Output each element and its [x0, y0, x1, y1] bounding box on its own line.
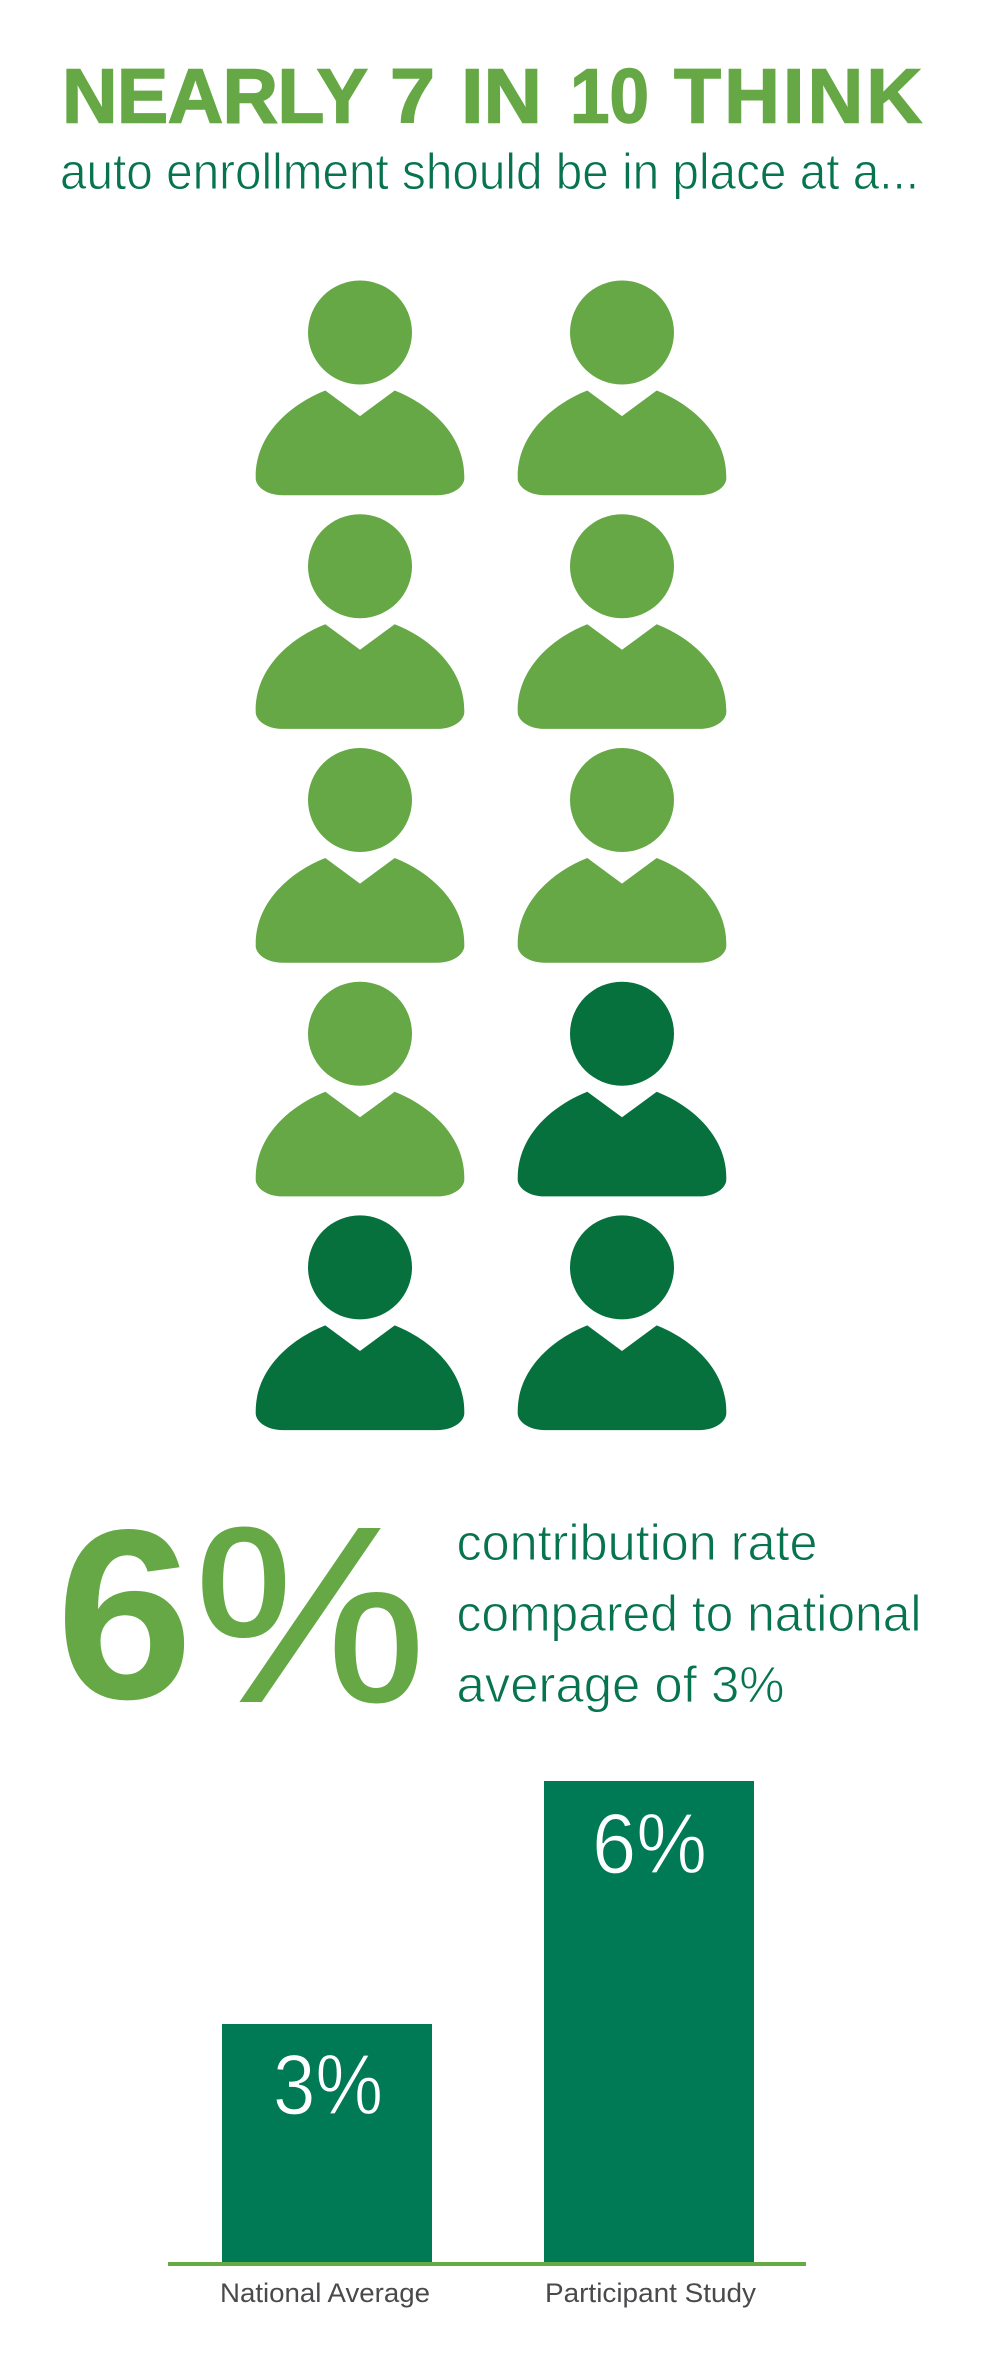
statistic description: average of 3%: [456, 1656, 784, 1713]
person 5: [256, 748, 464, 963]
person 3: [256, 514, 464, 729]
label: national average: National Average: [220, 2278, 430, 2308]
baseline axis: [168, 2262, 806, 2266]
subtitle: auto enrollment should be in place at a...: [60, 143, 919, 200]
statistic description: compared to national: [456, 1585, 922, 1642]
bar chart: [168, 1781, 806, 2308]
bar: national average: [222, 2024, 432, 2264]
pictogram: 7 of 10 people: [256, 280, 726, 1430]
person 7: [256, 982, 464, 1196]
bar: participant study: [544, 1781, 754, 2264]
person 6: [518, 748, 726, 963]
person 2: [518, 280, 726, 495]
statistic description: [456, 1514, 922, 1713]
label: participant study: Participant Study: [545, 2278, 757, 2308]
title: IN: [461, 54, 542, 140]
big statistic: 6%: [56, 1475, 426, 1754]
big statistic: 6%: 6: [56, 1480, 193, 1750]
person 10: [518, 1215, 726, 1430]
title: THINK: [674, 54, 922, 140]
person 4: [518, 514, 726, 729]
statistic description: contribution rate: [456, 1514, 818, 1571]
person 8: [518, 982, 726, 1196]
person 9: [256, 1215, 464, 1430]
title: 10: [570, 54, 649, 140]
person 1: [256, 280, 464, 495]
value: 6%: 6%: [592, 1797, 707, 1892]
big statistic: 6%: %: [194, 1475, 426, 1754]
title: [62, 54, 922, 140]
title: 7: [390, 54, 435, 140]
title: NEARLY: [62, 54, 368, 140]
value: 3%: 3%: [273, 2038, 383, 2133]
